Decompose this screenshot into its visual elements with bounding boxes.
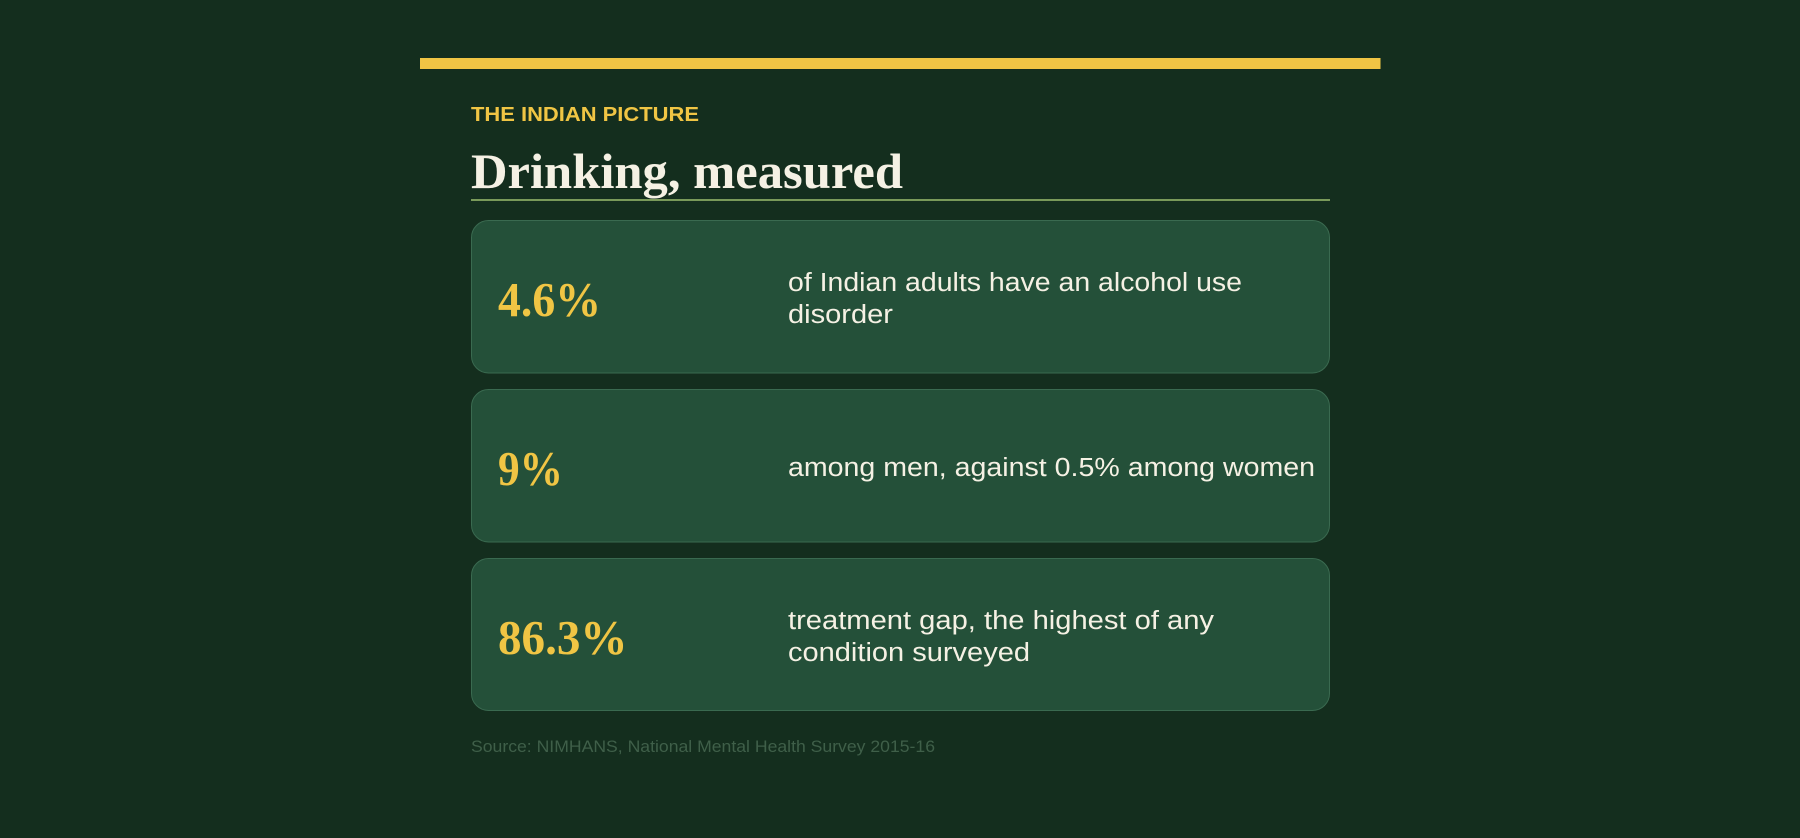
top accent bar bbox=[420, 58, 1380, 69]
stat number: 4.6% bbox=[498, 272, 601, 327]
title rule bbox=[471, 199, 1330, 201]
stat number: 86.3% bbox=[498, 610, 628, 665]
title: Drinking, measured bbox=[471, 143, 903, 199]
panel: stat 4.6% bbox=[472, 220, 1330, 373]
stat description: of Indian adults have an alcohol use bbox=[788, 269, 1242, 297]
panel: stat 86.3% bbox=[472, 558, 1330, 710]
stat description: among men, against 0.5% among women bbox=[788, 454, 1315, 482]
eyebrow heading: THE INDIAN PICTURE bbox=[471, 103, 699, 126]
stat description: disorder bbox=[788, 301, 894, 329]
stat description: condition surveyed bbox=[788, 639, 1030, 667]
panel: stat 9% bbox=[472, 390, 1330, 542]
stat number: 9% bbox=[498, 441, 563, 496]
stat description: treatment gap, the highest of any bbox=[788, 607, 1214, 635]
source note: Source: NIMHANS, National Mental Health Survey 2015-16 bbox=[471, 737, 935, 756]
